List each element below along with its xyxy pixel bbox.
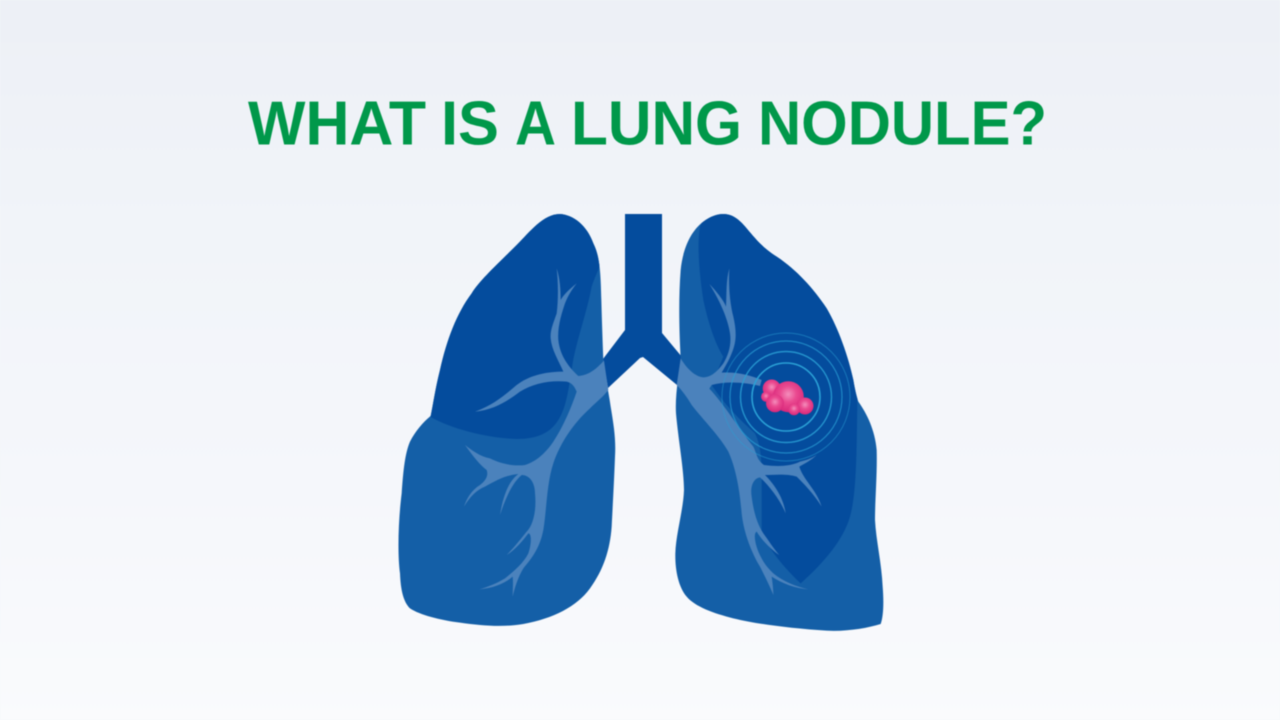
title: IS: [441, 90, 499, 158]
trachea: [603, 214, 682, 388]
title: WHAT: [248, 90, 426, 158]
left lung: [390, 200, 615, 626]
left bronchial tree: [464, 268, 608, 597]
title: LUNG: [571, 90, 742, 158]
left lung upper lobe: [430, 214, 600, 439]
right lung darker lobe: [698, 214, 858, 583]
title: NODULE?: [758, 90, 1047, 158]
infographic: what is a lung nodule: [247, 100, 1044, 632]
left lung lower lobe: [398, 214, 615, 626]
right lung: [674, 213, 884, 632]
right lung lighter lobe: [675, 214, 883, 631]
title: A: [515, 90, 556, 158]
pink lung nodule: [761, 380, 814, 415]
title: [248, 90, 1047, 158]
right bronchial tree: [677, 268, 822, 595]
signal rings around nodule: [722, 333, 850, 461]
